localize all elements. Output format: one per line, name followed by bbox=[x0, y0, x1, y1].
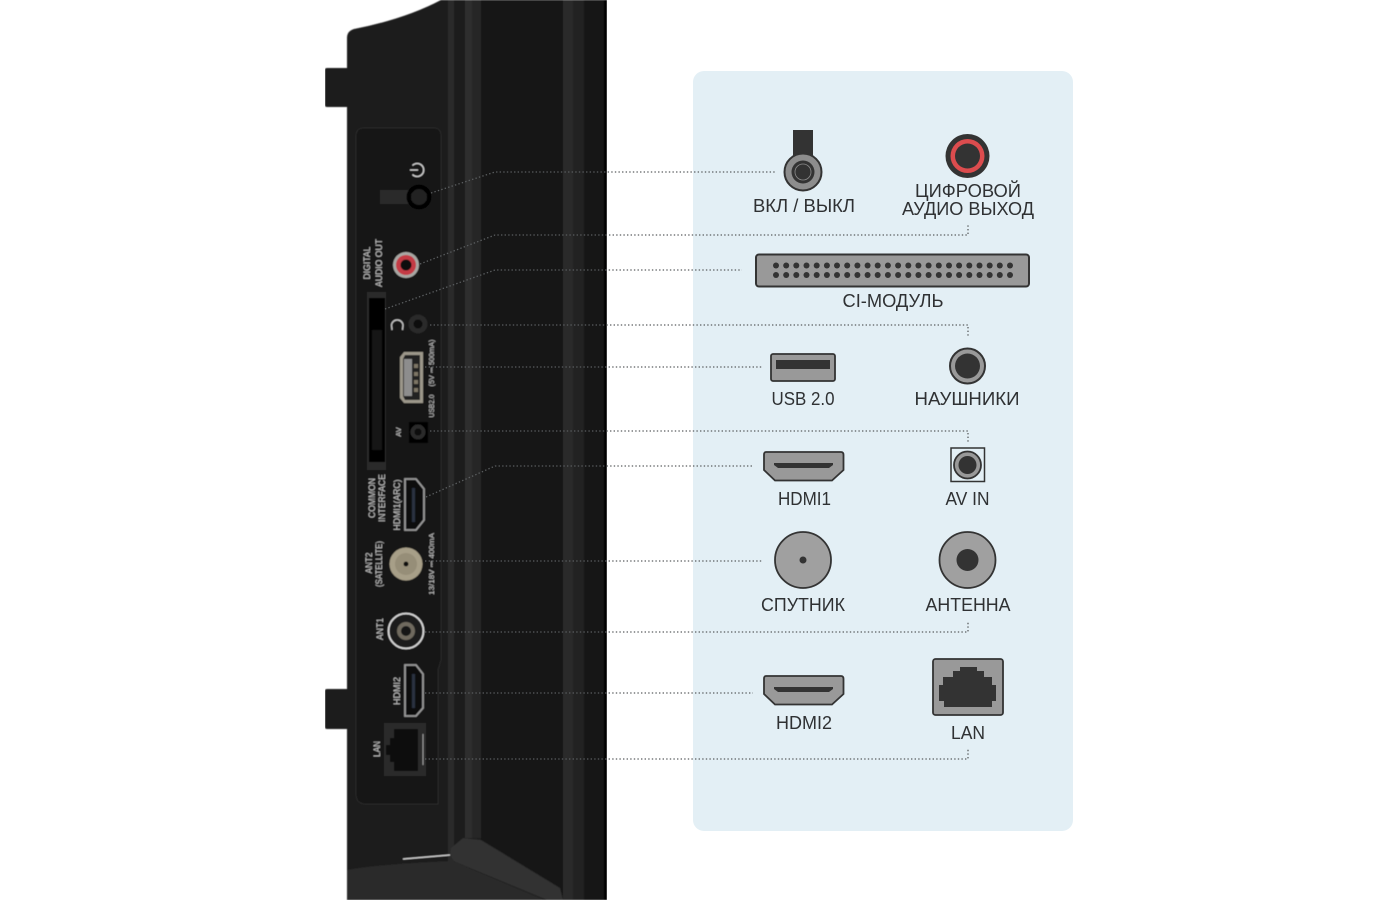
common interface label line 2: INTERFACE bbox=[377, 474, 388, 522]
label: HDMI2: HDMI2 bbox=[776, 713, 832, 733]
label: AV in: AV IN bbox=[946, 489, 990, 509]
headphone jack bbox=[408, 314, 428, 334]
label: USB: USB 2.0 bbox=[772, 389, 834, 409]
power icon bbox=[410, 164, 424, 176]
label: satellite: СПУТНИК bbox=[761, 595, 846, 615]
ANT2 satellite port bbox=[390, 548, 422, 580]
stand knob top bbox=[325, 68, 349, 107]
TV frame strips bbox=[448, 0, 607, 900]
icon: USB bbox=[771, 354, 835, 381]
label: HDMI1: HDMI1 bbox=[778, 489, 831, 509]
on/off joystick bbox=[380, 184, 432, 210]
icon: HDMI2 bbox=[764, 676, 844, 704]
ANT2 label line 2: (SATELLITE) bbox=[374, 541, 385, 587]
headphone icon bbox=[392, 320, 403, 330]
connector panel bbox=[356, 128, 441, 804]
HDMI1 label: HDMI1(ARC) bbox=[392, 480, 403, 530]
icon: CI module bbox=[756, 254, 1029, 286]
HDMI2 label: HDMI2 bbox=[392, 677, 403, 705]
icon: on/off joystick bbox=[784, 130, 822, 190]
TV rear body bbox=[347, 0, 452, 900]
label: on/off: ВКЛ / ВЫКЛ bbox=[753, 196, 855, 216]
digital audio out label line 2: AUDIO OUT bbox=[374, 239, 385, 287]
icon: headphones jack bbox=[950, 348, 985, 384]
stand knob bottom bbox=[325, 689, 349, 729]
icon: AV in bbox=[951, 448, 984, 482]
label: digital audio out line 2: АУДИО ВЫХОД bbox=[902, 199, 1034, 219]
label: headphones: НАУШНИКИ bbox=[914, 389, 1020, 409]
ANT1 port bbox=[388, 614, 424, 648]
icon: satellite bbox=[775, 532, 831, 588]
leader lines bbox=[385, 172, 968, 759]
digital audio port bbox=[392, 251, 420, 279]
satellite power label: 13/18V ⎓ 400mA bbox=[427, 533, 436, 595]
icon: LAN bbox=[933, 659, 1003, 715]
AV jack bbox=[409, 422, 428, 443]
common interface slot bbox=[367, 292, 386, 470]
common interface label: COMMON bbox=[367, 478, 378, 518]
label: antenna: АНТЕННА bbox=[926, 595, 1010, 615]
icon: HDMI1 bbox=[764, 452, 844, 480]
LAN label: LAN bbox=[372, 741, 383, 757]
digital audio out label: DIGITAL bbox=[362, 246, 373, 280]
HDMI1 port bbox=[405, 479, 424, 530]
label: LAN: LAN bbox=[951, 723, 985, 743]
ANT2 label: ANT2 bbox=[364, 552, 375, 574]
icon: antenna bbox=[940, 532, 996, 588]
stand foot bbox=[347, 838, 563, 900]
info panel background bbox=[693, 71, 1073, 831]
label: digital audio out: ЦИФРОВОЙ bbox=[915, 180, 1021, 201]
HDMI2 port bbox=[405, 665, 423, 716]
icon: digital audio bbox=[946, 134, 990, 178]
LAN port bbox=[384, 723, 426, 776]
USB power label: (5V ⎓ 500mA) bbox=[429, 340, 436, 386]
ANT1 label: ANT1 bbox=[375, 618, 386, 640]
USB label: USB2.0 bbox=[429, 394, 436, 418]
AV label: AV bbox=[394, 427, 403, 437]
USB port bbox=[400, 352, 423, 403]
label: CI module: CI-МОДУЛЬ bbox=[842, 291, 944, 311]
TV side view bbox=[325, 0, 607, 900]
